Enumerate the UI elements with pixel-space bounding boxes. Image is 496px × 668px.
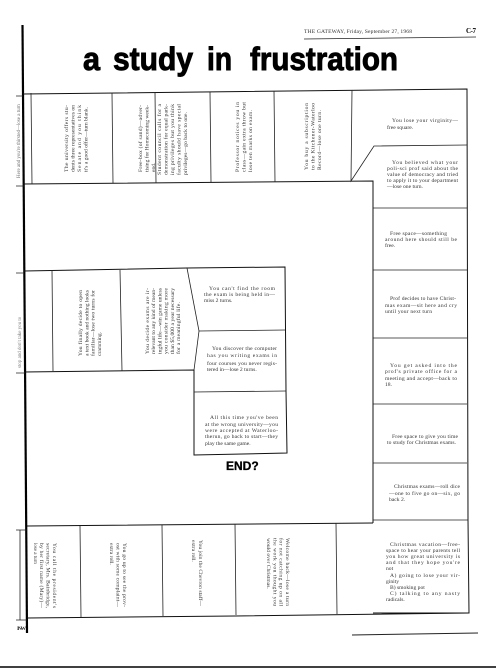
square: Christmas exam	[385, 295, 457, 315]
square: Christmas vacation: you how great university is	[386, 554, 460, 560]
square: welcome back: Welcome back—lose a turn	[284, 538, 290, 606]
square: president's secretary: lose a turn	[32, 543, 37, 564]
square: free space	[385, 231, 458, 249]
square: university senate	[63, 105, 90, 172]
square: computer: has you writing exams in	[207, 353, 277, 359]
square: private office	[385, 363, 458, 388]
square: exams irrelevant: than $5,000 a year necessary	[169, 288, 176, 354]
square: welcome back	[265, 538, 290, 606]
square: Christmas vacation: Christmas vacation—free-	[390, 541, 460, 548]
square: student council: ing privileges but you think	[170, 104, 176, 175]
square: president's secretary: secretary, Mrs. Bainbridge,	[44, 543, 50, 609]
square: Chevron staff: extra roll.	[190, 540, 196, 562]
square: roll dice: back 2.	[389, 497, 406, 503]
square: wrong university: play the same game.	[205, 441, 251, 447]
square: professor notices: lose ten marks on exam.	[248, 109, 254, 172]
square: time to study	[387, 434, 459, 446]
square: exams irrelevant: relevant to any kind of mean-	[150, 288, 157, 354]
newspaper header: THE GATEWAY, Friday, September 27, 1968	[304, 29, 412, 35]
square: poli-sci prof: to apply it to your department	[387, 178, 458, 184]
margin ticks	[16, 96, 478, 635]
square: Christmas exam: mas exam—sit here and cry	[385, 303, 457, 309]
square: computer	[207, 346, 277, 373]
square: wrong university: at the wrong university—you	[205, 422, 278, 428]
title	[83, 41, 398, 77]
square: exams irrelevant: ingful life—win game unless	[156, 288, 163, 354]
square: free space: around here should still be	[385, 237, 458, 243]
square: student council: privileges—go back to one.	[183, 111, 189, 175]
square: can't find room	[204, 285, 276, 304]
square: exams irrelevant: You decide exams are ir-	[145, 288, 151, 354]
square: welcome back: would over Christmas.	[265, 538, 271, 589]
square: provost: You go up to see the prov-	[121, 543, 127, 607]
title: a	[83, 41, 100, 77]
square: professor notices: Professor notices you in	[234, 102, 241, 172]
square: private office: 18.	[385, 382, 393, 388]
margin mark: INW	[17, 626, 26, 632]
square: text book	[77, 290, 103, 356]
square: student council: demonstration for equal park-	[162, 104, 170, 175]
end label: END?	[226, 459, 259, 473]
square: president's secretary: You call the president's	[51, 543, 57, 608]
square: roll dice	[388, 484, 461, 503]
square: free box: Free-box (of sand)—adver-	[137, 105, 144, 172]
title: frustration	[250, 41, 398, 77]
square: Christmas exam: until your next turn	[385, 309, 432, 315]
square: can't find room: the exam is being held in—	[204, 292, 275, 298]
square: student council	[156, 103, 189, 175]
square: Christmas vacation: A) going to lose your vir-	[390, 572, 460, 579]
square: student council: Student council calls for a	[156, 103, 163, 175]
square: provost: extra roll.	[108, 543, 114, 565]
board outline and square dividers	[23, 89, 469, 618]
square: student council: faculty should have special	[176, 104, 182, 175]
square: text book: You finally decide to open	[77, 290, 84, 356]
square: subscription	[304, 103, 323, 170]
margin text: middle: stop and don't take you to	[18, 316, 23, 368]
square: president's secretary	[32, 543, 57, 609]
square: Chevron staff	[190, 540, 204, 606]
square: can't find room: miss 2 turns.	[204, 298, 233, 304]
square: Christmas exam: Prof decides to have Christ-	[390, 295, 456, 302]
square: professor notices	[234, 102, 254, 172]
newspaper header: C-7	[466, 27, 476, 35]
square: virginity: free square.	[387, 124, 414, 131]
square: time to study: Free space to give you time	[392, 434, 459, 440]
square: wrong university: were accepted at Waterloo-	[205, 428, 278, 434]
square: Christmas vacation: B) smoking pot	[390, 584, 425, 591]
square: poli-sci prof: —lose one turn.	[386, 184, 423, 190]
square: free box: tising for Homecoming week-	[144, 105, 150, 172]
square: welcome back: the work you thought you	[271, 538, 277, 606]
margin text: top: Here and you're thirsted—lose a turn	[17, 104, 22, 178]
square: free box	[137, 105, 157, 172]
title: in	[207, 41, 232, 77]
square: university senate: The university offers stu-	[63, 105, 70, 172]
square: subscription: You buy a subscription	[304, 103, 310, 170]
newspaper header	[304, 27, 476, 39]
square: private office: prof's private office for a	[385, 368, 458, 375]
square: poli-sci prof: value of democracy and tried	[387, 171, 458, 178]
square: Christmas vacation: ginity	[386, 579, 399, 585]
square: wrong university: All this time you've been	[210, 415, 278, 421]
square: poli-sci prof: You believed what your	[392, 160, 458, 166]
square: computer: tered in—lose 2 turns.	[207, 367, 257, 373]
square: professor notices: class—gain extra throw but	[242, 102, 248, 172]
square: roll dice: Christmas exams—roll dice	[394, 484, 461, 490]
square: welcome back: for not catching up on all	[278, 538, 285, 606]
square: private office: meeting and accept—back to	[385, 376, 457, 382]
square: text book: cramming.	[97, 331, 103, 356]
square: free space: free.	[385, 242, 396, 249]
square: text book: a text book and nothing looks	[84, 290, 90, 356]
square: subscription: Record—lose one turn.	[317, 109, 323, 170]
square: wrong university	[205, 415, 278, 447]
square: poli-sci prof	[386, 160, 459, 190]
square: time to study: to study for Christmas exams.	[387, 439, 457, 446]
square: university senate: Senate and you think	[77, 105, 83, 172]
square: private office: You get asked into the	[390, 363, 458, 369]
square: roll dice: —one to five go on—six, go	[388, 490, 460, 497]
square: exams irrelevant	[145, 287, 182, 354]
square: computer: four courses you never regis-	[207, 360, 277, 367]
square: university senate: it's a good offer—turn blank.	[82, 106, 90, 172]
square: Chevron staff: You join the Chevron staff—	[197, 540, 204, 606]
square: Christmas vacation	[386, 541, 461, 603]
square: Christmas vacation: and that they hope you're	[386, 560, 461, 566]
square: wrong university: therun, go back to start—they	[205, 434, 278, 440]
square: text book: familiar—lose two turns for	[90, 290, 97, 356]
square: can't find room: You can't find the room	[209, 285, 276, 292]
square: subscription: to the Kitchener-Waterloo	[310, 103, 316, 170]
square: provost	[108, 543, 127, 607]
square: Christmas vacation: space to hear your parents tell	[386, 548, 460, 554]
square: Christmas vacation: radicals.	[386, 597, 405, 603]
square: exams irrelevant: for a meaningful life.	[175, 301, 182, 354]
square: poli-sci prof: poli-sci prof said about the	[387, 165, 459, 172]
square: Christmas vacation: C) talking to any nasty	[390, 590, 460, 597]
square: exams irrelevant: you consider making more	[164, 287, 170, 354]
square: provost: ost with some complaint—	[114, 543, 120, 607]
square: computer: You discover the computer	[212, 346, 277, 352]
square: virginity	[387, 118, 458, 131]
square: Christmas vacation: not	[386, 566, 394, 572]
square: university senate: dents three representatives on	[70, 105, 76, 172]
title: study	[113, 41, 193, 77]
square: free box: end.	[151, 162, 157, 172]
square: virginity: You lose your virginity—	[392, 118, 458, 124]
square: president's secretary: by her first name (Mary)—	[38, 543, 45, 608]
left margin rule	[22, 25, 27, 633]
page bottom rule	[0, 666, 496, 668]
square: free space: Free space—something	[390, 231, 447, 237]
